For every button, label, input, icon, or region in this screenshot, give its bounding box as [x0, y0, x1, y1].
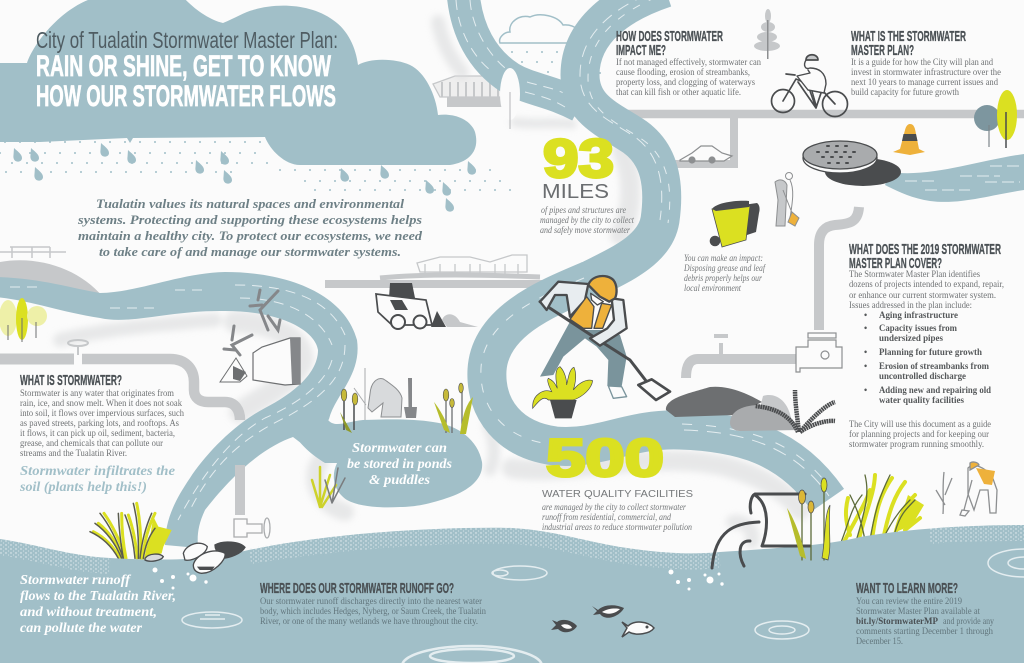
closing body: for planning projects and for keeping our — [849, 429, 989, 439]
face — [591, 293, 603, 305]
icon: tied trash bag — [220, 358, 247, 382]
river water, bottom — [0, 525, 1024, 663]
icon: white rock slab — [253, 338, 300, 385]
body: grease, and chemicals that can pollute our — [20, 438, 163, 448]
bullet list: • — [864, 385, 867, 395]
icon: yellow plant in pot — [533, 367, 593, 418]
miles description: of pipes and structures are — [541, 205, 626, 215]
headline: RAIN OR SHINE, GET TO KNOW — [36, 50, 331, 83]
bullet list: • — [864, 347, 867, 357]
rain drops — [13, 143, 476, 212]
icon: deer antlers branches — [224, 290, 280, 355]
icon: skid steer loader — [376, 283, 478, 329]
pond caption: be stored in ponds — [347, 456, 452, 471]
icon: fish — [551, 605, 654, 637]
icon: cattails and tall grass by culvert — [840, 475, 924, 545]
bullet list: Planning for future growth — [879, 347, 982, 357]
intro paragraph: Tualatin values its natural spaces and environmental — [96, 197, 405, 211]
bullet list: undersized pipes — [879, 333, 943, 343]
heading: HOW DOES STORMWATER — [616, 29, 723, 45]
icon: bank grass left — [90, 503, 172, 558]
body: cause flooding, erosion of streambanks, — [616, 67, 750, 77]
grey hill and left house — [0, 247, 102, 296]
legs — [540, 322, 627, 387]
right arm — [590, 298, 627, 346]
bullet list: Capacity issues from — [879, 323, 957, 333]
body: Stormwater Master Plan available at — [856, 606, 980, 616]
bullet list: water quality facilities — [879, 395, 964, 405]
icon: cyclist — [772, 55, 848, 116]
facilities description: runoff from residential, commercial, and — [542, 512, 671, 522]
intro paragraph: maintain a healthy city. To protect our ecosystems, we need — [78, 229, 423, 243]
icon: pine tree — [754, 9, 780, 59]
body: Stormwater is any water that originates from — [20, 388, 174, 398]
tree: white ellipse — [500, 68, 520, 129]
pond caption: Stormwater can — [352, 440, 447, 455]
right river and manhole outflow — [885, 154, 1024, 202]
facilities label: WATER QUALITY FACILITIES — [542, 489, 693, 500]
bullet list: Adding new and repairing old — [879, 385, 991, 395]
number 93: 93 — [543, 129, 614, 189]
pond caption: & puddles — [369, 472, 430, 487]
icon: cattails near pond, right — [434, 383, 473, 434]
miles label: MILES — [542, 180, 609, 203]
icon: person raking — [775, 172, 799, 226]
upper river — [481, 0, 829, 500]
grey road and house, centre — [325, 255, 545, 284]
facilities description: are managed by the city to collect stormwater — [542, 502, 686, 512]
runoff caption: and without treatment, — [20, 604, 157, 619]
runoff caption: flows to the Tualatin River, — [20, 588, 176, 603]
icon: manhole and shadow — [803, 141, 901, 186]
shoe — [608, 386, 627, 398]
bullet list: uncontrolled discharge — [879, 371, 966, 381]
text: you can make an impact: You can make an impact: — [684, 253, 763, 263]
body: body, which includes Hedges, Nyberg, or Saum Creek, the Tualatin — [260, 606, 486, 616]
icon: bubbles left — [152, 568, 208, 590]
icon: outfall culvert — [712, 494, 810, 568]
title — [36, 27, 338, 113]
bullet list: • — [864, 323, 867, 333]
body: as paved streets, parking lots, and rooftops. As — [20, 418, 179, 428]
grey underground pipes, top — [615, 114, 1024, 164]
headline: HOW OUR STORMWATER FLOWS — [36, 80, 336, 113]
callout: infiltrates: soil (plants help this!) — [19, 479, 147, 494]
bullet list: Aging infrastructure — [879, 310, 958, 320]
body: Our stormwater runoff discharges directly into the nearest water — [260, 596, 482, 606]
stat: 500 facilities — [542, 429, 693, 532]
text: what is the stormwater master plan — [851, 29, 1001, 97]
intro body: The Stormwater Master Plan identifies — [849, 269, 980, 279]
body: it flows, it can pick up oil, sediment, bacteria, — [20, 428, 175, 438]
icon: car — [680, 146, 732, 163]
runoff caption: Stormwater runoff — [20, 572, 132, 587]
heading: MASTER PLAN? — [851, 43, 914, 59]
body: It is a guide for how the City will plan and — [851, 57, 993, 67]
ripples in water — [182, 549, 1024, 663]
body: build capacity for future growth — [851, 87, 959, 97]
branch river from top — [456, 0, 580, 107]
bullet list: • — [864, 310, 867, 320]
icon: river rocks — [145, 542, 245, 573]
body: comments starting December 1 through — [856, 626, 993, 636]
stat: 93 miles — [540, 129, 634, 235]
miles description: and safely move stormwater — [540, 225, 630, 235]
text: where does runoff go — [260, 581, 486, 626]
facilities description: industrial areas to reduce stormwater pollution — [542, 522, 692, 532]
closing body: The City will use this document as a guide — [849, 419, 991, 429]
number 500: 500 — [546, 429, 664, 488]
shirt centre — [587, 302, 603, 328]
text: you can make an impact: debris properly helps our — [684, 273, 762, 283]
body: that can kill fish or other aquatic life. — [616, 87, 741, 97]
bullet list: Erosion of streambanks from — [879, 361, 989, 371]
body: and provide any — [941, 616, 994, 626]
heading: WHAT IS STORMWATER? — [20, 373, 122, 389]
intro paragraph: to take care of and manage our stormwater systems. — [99, 245, 401, 259]
bullet list: • — [864, 361, 867, 371]
intro body: Issues addressed in the plan include: — [849, 300, 972, 310]
miles description: managed by the city to collect — [540, 215, 634, 225]
callout: infiltrates: Stormwater infiltrates the — [20, 463, 175, 478]
intro body: or enhance our current stormwater system. — [849, 290, 996, 300]
body: December 15. — [856, 636, 903, 646]
icon: bubbles middle — [668, 570, 724, 590]
body: If not managed effectively, stormwater can — [616, 57, 761, 67]
heading: IMPACT ME? — [616, 43, 666, 59]
body: streams and the Tualatin River. — [20, 448, 127, 458]
text: how does stormwater impact me — [616, 29, 761, 97]
body: invest in stormwater infrastructure over the — [851, 67, 1001, 77]
grey road and house, upper — [433, 74, 512, 102]
body: next 10 years to manage current issues and — [851, 77, 998, 87]
text: what does the 2019 plan cover — [849, 242, 1004, 449]
body: River, or one of the many wetlands we have throughout the city. — [260, 616, 478, 626]
shovel — [540, 302, 647, 382]
closing body: stormwater program running smoothly. — [849, 439, 984, 449]
icon: worker with shovel — [540, 276, 670, 400]
icon: grass tuft at pond — [312, 467, 345, 507]
icon: traffic cone — [893, 124, 925, 155]
icon: rocks and fern — [666, 387, 835, 432]
body: into soil, it flows over impervious surfaces, such — [20, 408, 184, 418]
runoff caption: can pollute the water — [20, 620, 143, 635]
icon: cattails by culvert — [787, 478, 830, 560]
main cloud — [0, 0, 476, 165]
shirt and left arm — [540, 282, 588, 317]
intro paragraph: systems. Protecting and supporting these ecosystems helps — [77, 213, 422, 227]
body: property loss, and clogging of waterways — [616, 77, 755, 87]
orange vest — [570, 297, 612, 328]
rain dots — [0, 52, 612, 190]
body: bit.ly/StormwaterMP — [856, 616, 938, 626]
small outline cloud — [500, 15, 582, 43]
left river — [0, 272, 358, 548]
intro body: dozens of projects intended to expand, repair, — [849, 279, 1004, 289]
shovel blade — [638, 379, 670, 400]
icon: yellow trash bin — [710, 201, 760, 247]
heading: MASTER PLAN COVER? — [849, 256, 942, 272]
body: rain, ice, and snow melt. When it does not soak — [20, 398, 182, 408]
icon: cattails near pond, left — [340, 389, 358, 433]
heading: WHERE DOES OUR STORMWATER RUNOFF GO? — [260, 581, 454, 597]
text: you can make an impact: local environment — [684, 283, 741, 293]
subtitle line: City of Tualatin Stormwater Master Plan: — [36, 27, 338, 53]
icon: person digging, right — [936, 462, 997, 516]
body: You can review the entire 2019 — [856, 596, 962, 606]
text: you can make an impact: Disposing grease and leaf — [683, 263, 766, 273]
icon: person planting sapling — [354, 368, 417, 420]
pond — [293, 405, 482, 507]
stipple halos beside rivers — [60, 22, 800, 542]
icon: grey and yellow trees — [974, 90, 1017, 148]
icon: right grey pipe with flange and valve — [686, 207, 859, 378]
text: what is stormwater — [19, 373, 184, 494]
hard hat — [588, 276, 617, 302]
icon: left grey pipe with valve — [0, 340, 270, 538]
text: want to learn more — [856, 581, 994, 646]
icon: left trees — [0, 298, 47, 342]
